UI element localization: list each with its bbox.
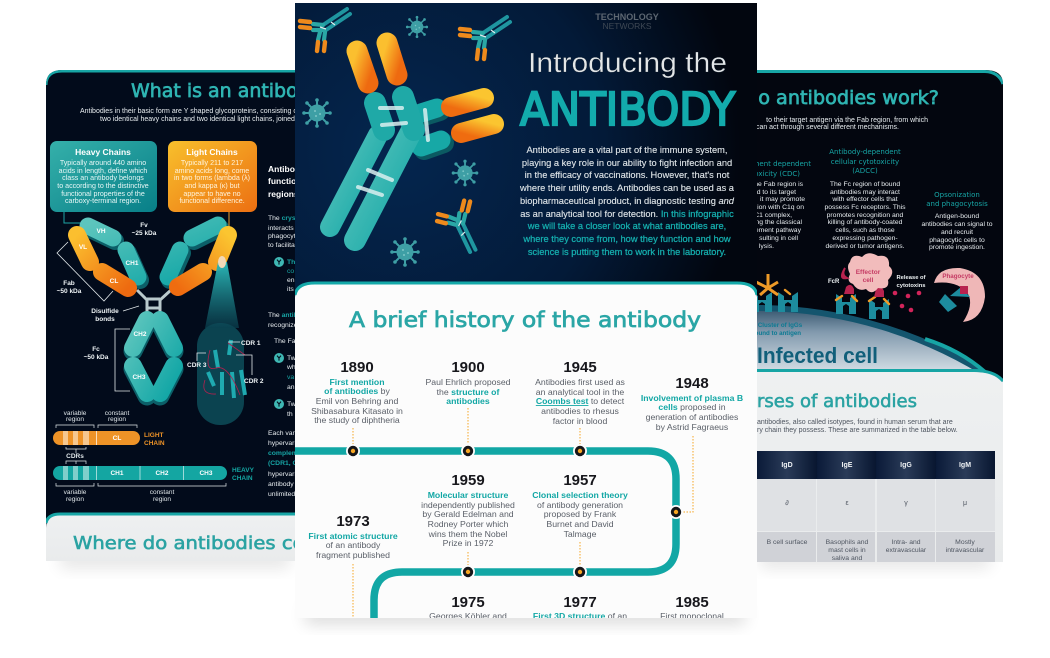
diagram: light and heavy chain bars: CHAIN — [144, 440, 165, 447]
intro paragraph: where their utility ends. Antibodies can be used as a — [519, 183, 735, 193]
diagram: antibody structure: VL — [79, 244, 87, 251]
box: heavy chains — [50, 141, 157, 212]
intro paragraph: in the efficacy of vaccinations. However, that's not — [525, 170, 730, 180]
intro paragraph: where they come from, how they function and how — [522, 234, 731, 244]
diagram: antibody structure: CH3 — [132, 374, 146, 381]
diagram: antibody structure: Disulfide — [91, 308, 119, 315]
column: opsonization: phagocytic cells to — [929, 237, 985, 244]
event 1973: of an antibody — [326, 540, 381, 550]
event 1959: wins them the Nobel — [428, 529, 507, 539]
diagram: light and heavy chain bars: constant — [150, 489, 174, 496]
text: right column of left page: The Fab — [274, 338, 300, 345]
column: ADCC: killing of antibody-coated — [828, 219, 903, 226]
table: antibody isotypes — [757, 451, 995, 562]
column: complement dependent cytotoxicity: d to its target — [757, 189, 796, 196]
event 1948: 1948 — [675, 375, 709, 392]
table: antibody isotypes: μ — [963, 500, 967, 507]
event 1973: First atomic structure — [308, 531, 398, 541]
text: right column of left page: unlimited — [268, 491, 295, 498]
icon: virus — [452, 160, 478, 186]
icon: virus — [390, 237, 420, 267]
column: complement dependent cytotoxicity: the Fab region is — [752, 181, 804, 188]
column: complement dependent cytotoxicity: tion with C1q on — [755, 204, 804, 211]
heading: what is an antibody: What is an antibody? — [131, 80, 331, 102]
timeline connectors — [353, 408, 693, 618]
event 1959 — [421, 472, 515, 548]
history section background — [295, 284, 757, 618]
illustration: infected cell: Infected cell — [757, 343, 878, 368]
diagram: light and heavy chain bars: region — [108, 416, 126, 423]
table: antibody isotypes: ε — [845, 500, 849, 507]
event 1977 — [533, 594, 627, 621]
table: antibody isotypes: B cell surface — [767, 539, 808, 546]
intro text: can act through several different mechanisms. — [756, 124, 899, 131]
table: antibody isotypes: Mostly — [955, 539, 975, 546]
table: antibody isotypes: IgM — [959, 462, 971, 469]
intro paragraph: science is putting them to work in the laboratory. — [528, 247, 726, 257]
title: antibody: ANTIBODY — [520, 83, 735, 136]
column: ADCC: possess Fc receptors. This — [824, 204, 906, 211]
event 1973 — [308, 513, 398, 560]
diagram: light and heavy chain bars: variable — [64, 489, 87, 496]
text: right column of left page: phagocytes — [268, 233, 303, 240]
box: heavy chains: to according to the distinctive — [57, 182, 149, 190]
text: right column of left page: wh — [286, 364, 296, 371]
logo: technology networks — [595, 14, 658, 29]
diagram: antibody structure: ~25 kDa — [132, 230, 157, 237]
event 1948: by Astrid Fagraeus — [656, 422, 729, 432]
table: antibody isotypes: IgG — [900, 462, 912, 469]
event 1957: Clonal selection theory — [532, 490, 628, 500]
diagram: antibody structure: Fv — [140, 222, 148, 229]
column: ADCC: promotes recognition and — [827, 212, 904, 219]
intro text — [80, 108, 305, 123]
event 1975 — [429, 594, 507, 621]
event 1959: Rodney Porter which — [428, 519, 508, 529]
event 1957: of antibody generation — [537, 500, 623, 510]
event 1959: independently published — [421, 500, 515, 510]
event 1957: Burnet and David — [546, 519, 614, 529]
band: classes of antibodies: rses of antibodies — [757, 391, 917, 412]
text: right column of left page: hypervari — [268, 471, 296, 478]
event 1959: Molecular structure — [428, 490, 508, 500]
panel: left page, what is an antibody — [46, 70, 295, 561]
intro paragraph: playing a key role in our ability to fight infection and — [522, 158, 732, 168]
band: classes of antibodies: antibodies, also called isotypes, found in human serum that are — [757, 419, 953, 426]
box: light chains: Typically 211 to 217 — [181, 159, 243, 167]
table: antibody isotypes: γ — [904, 500, 908, 507]
intro paragraph: Antibodies are a vital part of the immune system, — [526, 145, 728, 155]
intro paragraph: we will take a closer look at what antibodies are, — [527, 221, 726, 231]
box: light chains: amino acids long, come — [175, 167, 249, 175]
table: antibody isotypes: IgD — [781, 462, 793, 469]
diagram: antibody structure: CH1 — [125, 260, 139, 267]
illustration: effector cell: Release of — [896, 275, 926, 281]
event 1945: factor in blood — [553, 416, 607, 426]
illustration: infected cell — [750, 308, 1003, 385]
column: ADCC: The Fc region of bound — [830, 181, 900, 188]
table: antibody isotypes: ∂ — [785, 500, 789, 507]
event 1948 — [641, 375, 743, 432]
diagram: light and heavy chain bars: CH3 — [199, 470, 213, 477]
text: right column of left page: recognize — [268, 322, 298, 329]
diagram: antibody structure: CL — [110, 278, 118, 285]
box: light chains: and kappa (κ) but — [184, 182, 240, 190]
text: right column of left page: Tw — [287, 401, 296, 408]
column: complement dependent cytotoxicity: ing the classical — [754, 219, 802, 226]
table: antibody isotypes: Intra- and — [891, 539, 921, 546]
box: heavy chains: class an antibody belongs — [62, 174, 144, 182]
event 1945 — [535, 359, 626, 426]
column: opsonization: promote ingestion. — [929, 244, 985, 251]
text: right column of left page: co — [287, 268, 294, 275]
text: right column of left page: th — [287, 411, 293, 418]
icon: virus — [302, 98, 332, 128]
column: opsonization: Antigen-bound — [935, 213, 979, 220]
panel: center page — [295, 3, 757, 621]
event 1973: 1973 — [336, 513, 370, 530]
event 1977: 1977 — [563, 594, 597, 611]
event 1957 — [532, 472, 628, 539]
illustration: effector cell: cell — [863, 277, 874, 284]
heading: a brief history: A brief history of the antibody — [349, 308, 701, 332]
illustration: effector cell — [828, 253, 926, 312]
event 1975: Georges Köhler and — [429, 611, 507, 621]
intro paragraph: as an analytical tool for detection. In this infographic — [520, 209, 734, 219]
timeline path — [295, 451, 676, 618]
text: right column of left page: Antibodies — [268, 164, 312, 174]
diagram: light and heavy chain bars: CHAIN — [232, 475, 253, 482]
diagram: light and heavy chain bars: region — [66, 496, 84, 503]
icon: small antibody lower — [434, 198, 478, 254]
column: opsonization: and phagocytosis — [926, 200, 988, 208]
event 1890: the study of diphtheria — [314, 415, 400, 425]
event 1977: First 3D structure of an — [533, 611, 627, 621]
event 1985 — [660, 594, 724, 621]
event 1959: Prize in 1972 — [443, 538, 494, 548]
illustration: infected cell: bound to antigen — [751, 330, 801, 337]
box: light chains — [168, 141, 257, 212]
logo: technology networks: NETWORKS — [602, 21, 652, 31]
diagram: light and heavy chain bars: LIGHT — [144, 432, 164, 439]
band: where do antibodies come from — [46, 512, 295, 561]
event 1890: Shibasabura Kitasato in — [311, 406, 403, 416]
icon: small antibody top left — [300, 9, 350, 51]
column: complement dependent cytotoxicity: C1 complex, — [754, 212, 792, 219]
box: heavy chains: Heavy Chains — [75, 147, 131, 157]
diagram: light and heavy chain bars: CH1 — [110, 470, 124, 477]
diagram: antibody structure: bonds — [95, 316, 115, 323]
diagram: light and heavy chain bars: CH2 — [155, 470, 169, 477]
history section top edge — [295, 283, 757, 295]
diagram: CDR loop zoom: CDR 3 — [187, 362, 207, 369]
title: introducing the: Introducing the — [528, 47, 727, 78]
diagram: antibody structure: VH — [96, 228, 106, 235]
event 1900: 1900 — [451, 359, 485, 376]
diagram: CDR loop zoom — [187, 256, 264, 425]
header background — [295, 3, 757, 298]
table: antibody isotypes: mast cells in — [828, 547, 866, 554]
column: ADCC: derived or tumor antigens. — [826, 243, 905, 250]
text: right column of left page: The antibody — [268, 312, 310, 319]
column: complement dependent cytotoxicity: it may promote — [760, 196, 805, 203]
intro text: two identical heavy chains and two identical light chains, joined by — [100, 116, 305, 123]
logo: technology networks: TECHNOLOGY — [595, 12, 659, 22]
diagram: antibody structure: Fc — [92, 346, 100, 353]
intro paragraph: biopharmaceutical product, in diagnostic testing and — [520, 196, 735, 206]
box: light chains: appear to have no — [183, 190, 241, 198]
diagram: CDR loop zoom: CDR 1 — [241, 340, 261, 347]
diagram: antibody structure — [57, 212, 229, 396]
column: complement dependent cytotoxicity: lysis. — [759, 243, 774, 250]
column: ADCC: expressing pathogen- — [832, 235, 898, 242]
diagram: antibody structure: Fab — [63, 280, 75, 287]
illustration: effector cell: Effector — [856, 269, 881, 276]
event 1890: 1890 — [340, 359, 374, 376]
event 1945: Antibodies first used as — [535, 377, 626, 387]
event 1948: generation of antibodies — [646, 412, 739, 422]
table: antibody isotypes: intravascular — [946, 547, 985, 554]
event 1890: First mention — [329, 377, 385, 387]
intro text: to their target antigen via the Fab region, from which — [766, 117, 928, 124]
event 1945: Coombs test to detect — [536, 396, 625, 406]
text: right column of left page: Th — [287, 259, 295, 266]
event 1957: proposed by Frank — [544, 509, 617, 519]
illustration: large antibody — [330, 43, 494, 240]
column: complement dependent cytotoxicity: ment dependent — [753, 160, 811, 168]
table: antibody isotypes: saliva and — [832, 555, 863, 562]
event 1890: Emil von Behring and — [316, 396, 398, 406]
diagram: light and heavy chain bars: variable — [64, 410, 87, 417]
event 1945: 1945 — [563, 359, 597, 376]
table: antibody isotypes: extravascular — [886, 547, 927, 554]
column: ADCC: (ADCC) — [852, 167, 878, 175]
event 1945: an analytical tool in the — [536, 387, 624, 397]
text: right column of left page: interacts — [268, 225, 294, 232]
event 1957: 1957 — [563, 472, 597, 489]
illustration: phagocyte: Phagocyte — [942, 273, 974, 280]
column: ADCC: cells, such as those — [835, 227, 895, 234]
diagram: light and heavy chain bars: region — [153, 496, 171, 503]
text: right column of left page: functional — [268, 176, 309, 186]
icon: small antibody top right — [460, 17, 510, 59]
diagram: light and heavy chain bars: CL — [113, 435, 121, 442]
diagram: antibody structure: CH2 — [133, 331, 147, 338]
column: ADCC: cellular cytotoxicity — [831, 158, 899, 166]
page shadows — [60, 550, 990, 624]
column: complement dependent cytotoxicity — [757, 160, 811, 250]
illustration: effector cell: FcR — [828, 279, 840, 285]
box: heavy chains: functional properties of the — [61, 190, 145, 198]
box: heavy chains: acids in length, define which — [59, 167, 147, 175]
event 1900: the structure of — [437, 387, 499, 397]
box: heavy chains: carboxy-terminal region. — [65, 197, 141, 205]
diagram: light and heavy chain bars: CDRs — [66, 453, 84, 460]
event 1985: First monoclonal — [660, 611, 724, 621]
box: light chains: Light Chains — [186, 147, 238, 157]
diagram: light and heavy chain bars: region — [66, 416, 84, 423]
text: right column of left page: to facilitate — [268, 242, 301, 249]
column: opsonization: and recruit — [941, 229, 973, 236]
box: light chains: functional difference. — [179, 197, 245, 205]
diagram: antibody structure: ~50 kDa — [84, 354, 109, 361]
diagram: CDR loop zoom: CDR 2 — [244, 378, 264, 385]
table: antibody isotypes: Basophils and — [826, 539, 869, 546]
event 1975: 1975 — [451, 594, 485, 611]
illustration: phagocyte — [934, 268, 985, 322]
text: right column of left page: antibody — [268, 481, 294, 488]
box: heavy chains: Typically around 440 amino — [60, 159, 146, 167]
column: complement dependent cytotoxicity: toxicity (CDC) — [752, 170, 800, 178]
band: where do antibodies come from: Where do antibodies come from? — [73, 533, 398, 554]
box: light chains: in two forms (lambda (λ) — [174, 174, 250, 182]
event 1900: Paul Ehrlich proposed — [426, 377, 511, 387]
event 1959: by Gerald Edelman and — [422, 509, 514, 519]
event 1900: antibodies — [446, 396, 490, 406]
column: opsonization: antibodies can signal to — [921, 221, 993, 228]
column: opsonization — [921, 191, 993, 251]
text: right column of left page: complementarity — [268, 450, 323, 457]
illustration: infected cell: Cluster of IgGs — [758, 322, 803, 329]
table: antibody isotypes: IgE — [842, 462, 853, 469]
text: right column of left page: regions — [268, 189, 299, 199]
event 1900 — [426, 359, 511, 406]
event 1957: Talmage — [564, 529, 597, 539]
text: right column of left page: Tw — [287, 355, 296, 362]
column: ADCC: Antibody-dependent — [829, 148, 901, 156]
band: classes of antibodies: ry chain they possess. These are summarized in the table below. — [757, 427, 958, 434]
band: classes of antibodies — [750, 370, 1003, 562]
diagram: light and heavy chain bars: constant — [105, 410, 129, 417]
column: opsonization: Opsonization — [934, 191, 980, 199]
event 1890: of antibodies by — [324, 386, 390, 396]
panel: right page, how do antibodies work — [746, 70, 1003, 562]
text: right column of left page: Each vari — [268, 430, 297, 437]
text: right column of left page: The crystal — [268, 215, 304, 222]
text: right column of left page — [268, 166, 295, 496]
illustration: effector cell: cytotoxins — [896, 283, 926, 289]
text: right column of left page: hypervari — [268, 440, 296, 447]
icon: virus — [406, 16, 428, 38]
timeline nodes — [346, 444, 683, 579]
event 1948: cells proposed in — [658, 402, 726, 412]
column: ADCC — [824, 148, 906, 250]
column: complement dependent cytotoxicity: sulting in cell — [759, 235, 798, 242]
text: right column of left page: (CDR1, CDR2 — [268, 460, 311, 467]
event 1985: 1985 — [675, 594, 709, 611]
text: right column of left page: en — [287, 277, 295, 284]
intro paragraph — [519, 145, 735, 257]
diagram: light and heavy chain bars — [53, 410, 255, 503]
event 1959: 1959 — [451, 472, 485, 489]
column: ADCC: antibodies may interact — [830, 189, 900, 196]
diagram: antibody structure: ~50 kDa — [57, 288, 82, 295]
event 1948: Involvement of plasma B — [641, 393, 743, 403]
event 1973: fragment published — [316, 550, 390, 560]
text: right column of left page: its — [287, 286, 294, 293]
intro text — [756, 117, 928, 131]
illustration: antibodies on cell surface — [752, 274, 889, 319]
heading: how do antibodies work: do antibodies work? — [746, 87, 939, 109]
event 1945: antibodies to rhesus — [541, 406, 620, 416]
column: ADCC: with effector cells that — [831, 196, 898, 203]
column: complement dependent cytotoxicity: ement pathway — [755, 227, 802, 234]
event 1890 — [311, 359, 403, 425]
intro text: Antibodies in their basic form are Y shaped glycoproteins, consisting of — [80, 108, 299, 115]
text: right column of left page: va — [287, 374, 294, 381]
diagram: light and heavy chain bars: HEAVY — [232, 467, 255, 474]
text: right column of left page: an — [287, 384, 295, 391]
